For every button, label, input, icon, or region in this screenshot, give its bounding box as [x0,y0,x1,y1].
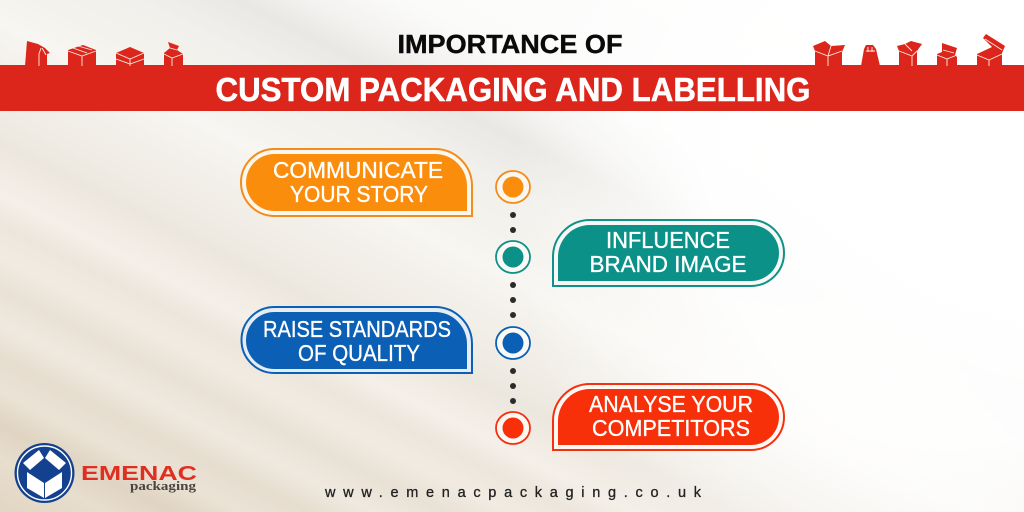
panel: communicate your story: YOUR STORY [290,181,428,207]
red banner with box silhouettes [0,34,1024,111]
panel: analyse your competitors: ANALYSE YOUR [589,391,753,417]
panel: analyse your competitors [553,384,784,450]
icon: shopping bag [861,45,880,66]
panel: communicate your story: COMMUNICATE [273,157,443,183]
marker: blue [496,327,530,359]
connector dots [510,212,516,404]
panel: raise standards of quality: RAISE STANDARDS [263,316,451,342]
logo emblem [14,443,74,503]
icon: bag [25,41,50,66]
marker: orange [496,171,530,203]
panel: analyse your competitors: COMPETITORS [592,415,750,441]
logo wordmark: EMENAC [81,463,197,485]
panel: influence brand image [553,220,784,286]
panel: influence brand image: INFLUENCE [606,227,730,253]
icon: carton [164,42,183,66]
icon: open box 2 [897,41,922,66]
panel: communicate your story [241,149,472,216]
panel: raise standards of quality: OF QUALITY [298,340,420,366]
banner title: CUSTOM PACKAGING AND LABELLING [216,71,810,108]
icon: closed box [68,45,96,66]
icon: flat box [116,47,144,66]
icon: hinged box [977,34,1005,66]
icon details [39,39,1002,66]
marker: red [496,412,530,444]
title line 1: IMPORTANCE OF [398,29,622,59]
marker: teal [496,241,530,273]
panel: raise standards of quality [242,307,472,373]
icon: tray box [937,43,957,66]
logo tagline: packaging [130,478,197,493]
panel: influence brand image: BRAND IMAGE [590,251,746,277]
website url: www.emenacpackaging.co.uk [324,485,702,501]
icon: open box 1 [813,41,845,66]
